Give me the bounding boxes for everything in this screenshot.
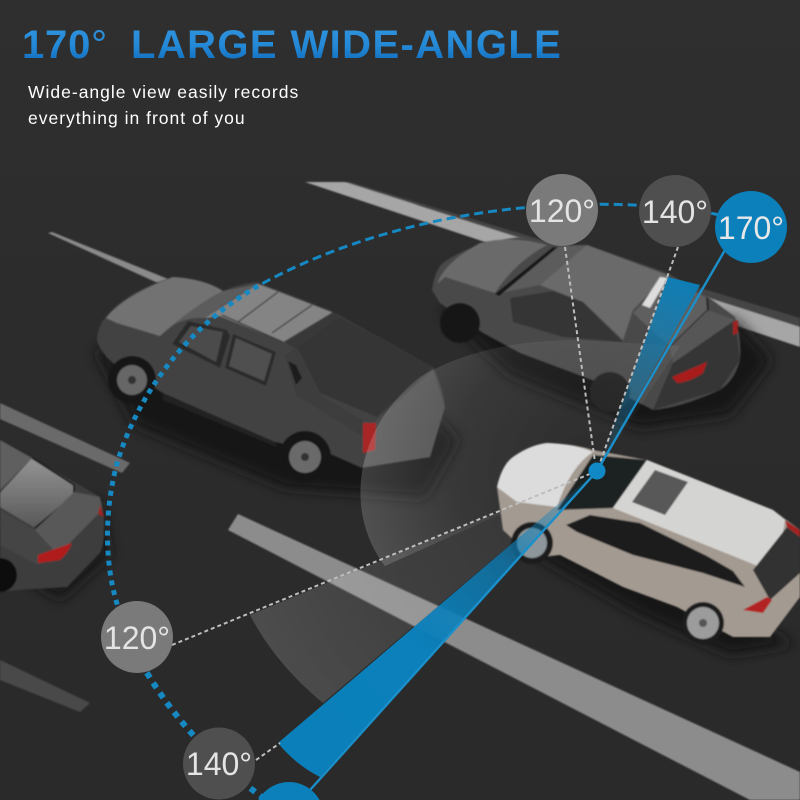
- badge: 140 upper: [639, 175, 711, 247]
- car: white wagon: [497, 443, 800, 644]
- title: LARGE WIDE-ANGLE: [131, 23, 562, 67]
- subtitle text: Wide-angle view easily records: [28, 82, 299, 102]
- field of view: grey sectors: [250, 340, 680, 703]
- car: grey coupe: [432, 237, 740, 412]
- badge: 170 upper: [715, 191, 787, 263]
- badge: 140 upper: 140°: [642, 194, 708, 230]
- subtitle text: everything in front of you: [28, 108, 246, 128]
- blue 170 degree line: [310, 250, 725, 790]
- badge: 170 upper: 170°: [718, 210, 784, 246]
- badge: 140 lower: 140°: [186, 746, 252, 782]
- road markings: [0, 182, 800, 800]
- badge: 140 lower: [183, 728, 255, 800]
- blue wedge: forward view: [597, 277, 700, 471]
- badge: 120 lower: 120°: [104, 620, 170, 656]
- car shadows: [0, 300, 795, 655]
- badge: 120 lower: [101, 601, 173, 673]
- subtitle text: [28, 82, 299, 128]
- badge: 120 upper: 120°: [529, 193, 595, 229]
- dashed viewing arc: [107, 204, 720, 797]
- badge: 120 upper: [526, 174, 598, 246]
- blue wedge: rear view: [278, 471, 597, 777]
- camera position dot: [588, 462, 606, 480]
- dotted guide lines: [172, 247, 678, 760]
- badge: 170 lower, cropped: [258, 782, 320, 800]
- car: dark car at left edge: [0, 440, 104, 592]
- title: 170°: [22, 23, 108, 67]
- car: black pickup truck: [97, 277, 445, 483]
